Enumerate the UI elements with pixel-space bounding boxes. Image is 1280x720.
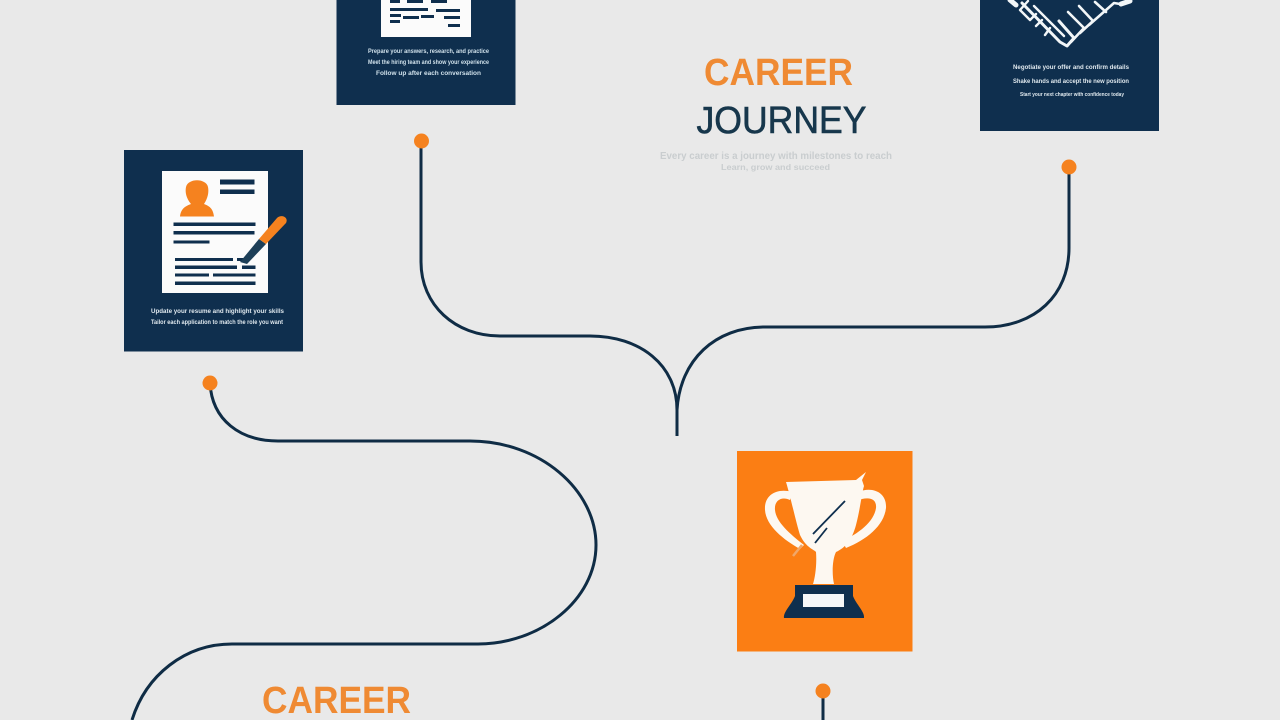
text: subtitle: Every career is a journey with milestones to reach <box>660 151 892 162</box>
text: resume caption <box>151 308 284 326</box>
icon: trophy <box>765 472 886 618</box>
text: offer caption: Start your next chapter with confidence today <box>1020 92 1124 98</box>
text: subtitle <box>660 151 892 172</box>
text: resume caption: Tailor each application to match the role you want <box>151 319 284 326</box>
panel: interview <box>336 0 516 105</box>
title: CAREER <box>704 52 853 94</box>
connector: trophy stem <box>822 691 824 720</box>
icon: pen <box>240 216 287 264</box>
icon: document <box>381 0 471 37</box>
text: offer caption: Negotiate your offer and confirm details <box>1013 64 1129 71</box>
node: trophy <box>816 684 830 698</box>
panel: resume <box>124 150 303 352</box>
icon: handshake <box>1010 0 1130 46</box>
text: offer caption <box>1013 64 1129 98</box>
text: interview caption <box>368 48 489 77</box>
text: resume caption: Update your resume and highlight your skills <box>151 308 284 315</box>
node: offer <box>1062 160 1076 174</box>
text: interview caption: Follow up after each conversation <box>376 70 481 77</box>
node: interview <box>414 134 429 148</box>
text: subtitle: Learn, grow and succeed <box>721 163 830 172</box>
title <box>696 52 866 142</box>
text: interview caption: Meet the hiring team and show your experience <box>368 59 489 66</box>
connector: interview to merge point <box>421 141 677 436</box>
connector: offer to merge point <box>677 167 1069 410</box>
title: JOURNEY <box>696 100 866 142</box>
connector: resume to bottom left <box>132 383 596 720</box>
icon: resume document <box>162 171 268 293</box>
panel: trophy <box>737 451 912 652</box>
text: interview caption: Prepare your answers, research, and practice <box>368 48 489 55</box>
panel: job offer <box>980 0 1159 131</box>
text: offer caption: Shake hands and accept the new position <box>1013 78 1129 85</box>
node: resume <box>202 376 218 390</box>
